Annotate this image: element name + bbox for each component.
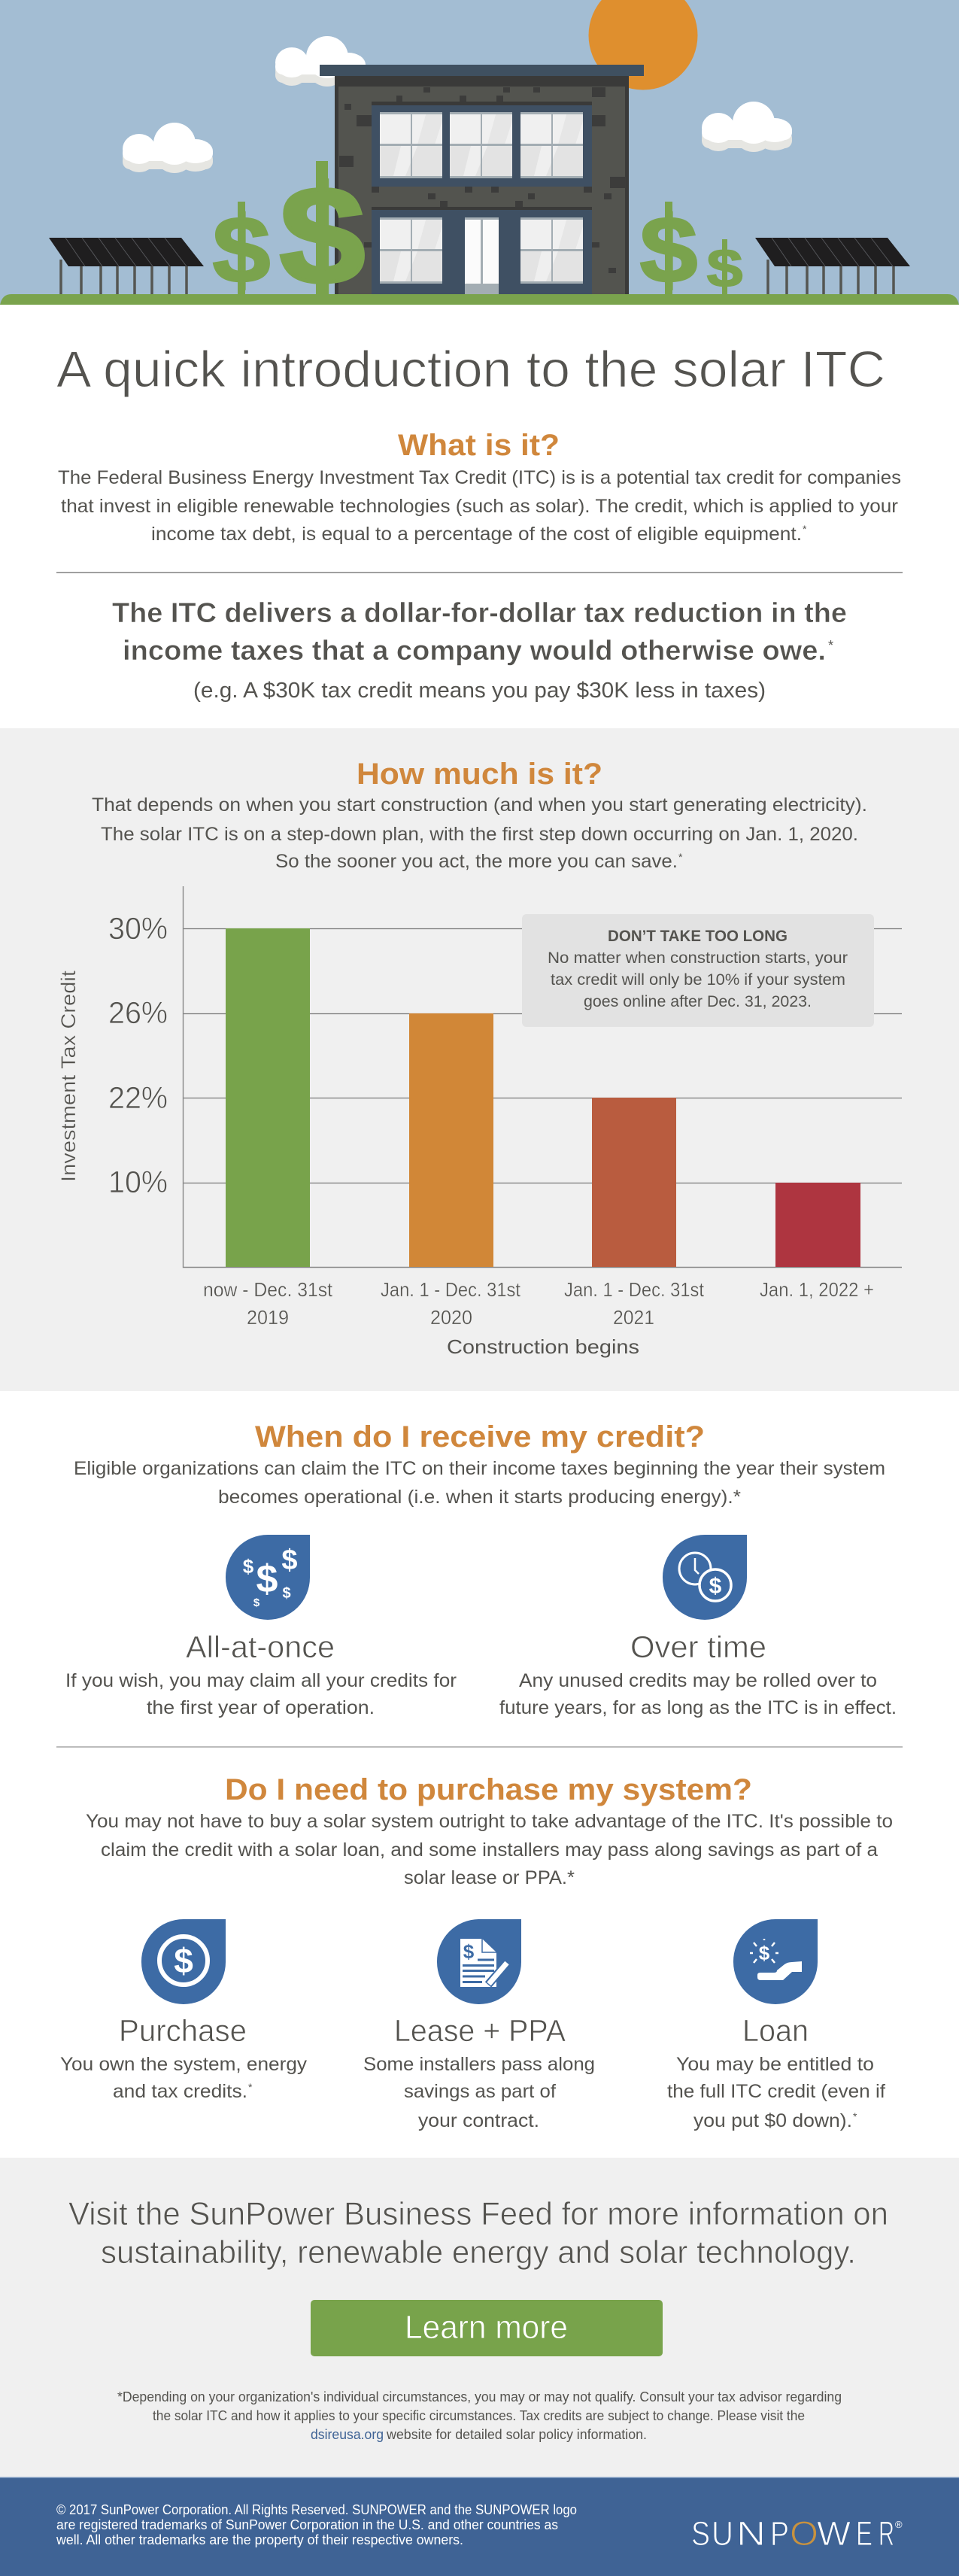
- option: loan: *: [853, 2110, 857, 2122]
- bar: 30%: [226, 928, 310, 1267]
- logo: SunPower: R: [879, 2514, 894, 2553]
- bar: 22%: [592, 1098, 676, 1267]
- logo: SunPower: W: [817, 2514, 851, 2553]
- option: loan: you put $0 down).: [693, 2110, 852, 2131]
- text block: visit the business feed: Visit the SunPower Business Feed for more information on: [68, 2196, 888, 2232]
- logo: SunPower: S: [691, 2514, 710, 2553]
- text block: copyright: are registered trademarks of SunPower Corporation in the U.S. and other countries as: [56, 2517, 558, 2532]
- heading: how much is it: How much is it?: [357, 758, 602, 791]
- icon: scattered dollars: $: [243, 1555, 254, 1578]
- text block: step-down explanation: *: [678, 851, 683, 863]
- x axis labels: Jan. 1 - Dec. 31st: [564, 1278, 705, 1301]
- icon: hand with dollar: [733, 1919, 818, 2004]
- option: lease + PPA: savings as part of: [404, 2081, 556, 2102]
- logo: SunPower: P: [770, 2514, 789, 2553]
- icon: cloud right: [702, 102, 792, 152]
- text block: definition: [58, 467, 901, 545]
- y axis labels: 22%: [108, 1080, 168, 1115]
- icon: cloud behind building: [275, 36, 366, 87]
- text block: footnote: [117, 2389, 842, 2442]
- button: learn more: [311, 2300, 663, 2356]
- callout: don't take too long: DON’T TAKE TOO LONG: [608, 928, 788, 945]
- x axis labels: 2021: [613, 1306, 654, 1329]
- panel: what is it: [58, 429, 901, 545]
- logo: SunPower: ®: [895, 2519, 903, 2530]
- x axis labels: Jan. 1 - Dec. 31st: [381, 1278, 521, 1301]
- icon: scattered dollars: $: [282, 1585, 291, 1602]
- button: learn more: Learn more: [405, 2309, 568, 2346]
- text block: eligibility: becomes operational (i.e. when it starts producing energy).*: [218, 1487, 741, 1508]
- y axis labels: 10%: [108, 1165, 168, 1199]
- icon: scattered dollars: $: [256, 1557, 278, 1601]
- option: lease + PPA: [363, 2013, 595, 2131]
- panel: how much is it: [0, 728, 959, 1391]
- option: purchase: Purchase: [119, 2013, 247, 2048]
- option: lease + PPA: Some installers pass along: [363, 2054, 595, 2075]
- option: lease + PPA: your contract.: [418, 2110, 539, 2131]
- callout: dollar-for-dollar statement: *: [828, 638, 833, 653]
- callout: don't take too long: No matter when construction starts, your: [548, 949, 848, 967]
- text block: definition: The Federal Business Energy Investment Tax Credit (ITC) is is a potential tax credit for companies: [58, 467, 901, 488]
- icon: scattered dollars: $: [281, 1545, 298, 1576]
- bar chart: [57, 886, 902, 1358]
- icon: hand with dollar: $: [759, 1942, 770, 1964]
- icon: dollar sign right: $: [640, 197, 697, 302]
- callout: dollar-for-dollar statement: income taxes that a company would otherwise owe.: [123, 635, 826, 666]
- icon: scattered dollars: $: [253, 1596, 260, 1609]
- ground: [0, 294, 959, 305]
- text block: footnote: dsireusa.org: [311, 2427, 384, 2442]
- text block: purchase intro: claim the credit with a solar loan, and some installers may pass along savings as part of a: [101, 1839, 878, 1861]
- building: [320, 65, 644, 294]
- option: over time: Any unused credits may be rolled over to: [519, 1670, 877, 1691]
- icon: contract document: [437, 1919, 521, 2004]
- option: purchase: [60, 2013, 308, 2102]
- text block: visit the business feed: [68, 2196, 888, 2271]
- option: loan: the full ITC credit (even if: [667, 2081, 885, 2102]
- text block: step-down explanation: So the sooner you act, the more you can save.: [275, 851, 678, 872]
- option: loan: Loan: [742, 2013, 809, 2048]
- text block: definition: that invest in eligible renewable technologies (such as solar). The credit, which is applied to your: [61, 496, 898, 517]
- icon: sun: [588, 0, 698, 90]
- text block: definition: income tax debt, is equal to a percentage of the cost of eligible equipment.: [151, 524, 802, 545]
- text block: purchase intro: You may not have to buy a solar system outright to take advantage of the ITC. It's possible to: [86, 1811, 893, 1832]
- x axis labels: 2019: [247, 1306, 289, 1329]
- logo: SunPower: O: [790, 2514, 818, 2553]
- callout: dollar-for-dollar statement: (e.g. A $30K tax credit means you pay $30K less in taxes): [193, 679, 766, 703]
- text block: purchase intro: [86, 1811, 893, 1888]
- text block: definition: *: [803, 523, 807, 535]
- option: loan: [667, 2013, 885, 2131]
- text block: footnote: *Depending on your organization's individual circumstances, you may or may not qualify. Consult your tax advisor regarding: [117, 2389, 842, 2404]
- hero illustration: [0, 0, 959, 314]
- option: over time: future years, for as long as the ITC is in effect.: [499, 1697, 897, 1718]
- option: lease + PPA: Lease + PPA: [394, 2013, 566, 2048]
- callout: dollar-for-dollar statement: The ITC delivers a dollar-for-dollar tax reduction in the: [112, 597, 847, 628]
- text block: copyright: [56, 2502, 577, 2547]
- icon: dollar coin: $: [174, 1941, 193, 1980]
- text block: visit the business feed: sustainability, renewable energy and solar technology.: [101, 2234, 856, 2271]
- text block: copyright: © 2017 SunPower Corporation. All Rights Reserved. SUNPOWER and the SUNPOWER logo: [56, 2502, 577, 2517]
- heading: what is it: What is it?: [398, 429, 560, 462]
- text block: step-down explanation: The solar ITC is on a step-down plan, with the first step down occurring on Jan. 1, 2020.: [101, 824, 858, 845]
- icon: solar array left: [49, 238, 204, 294]
- option: purchase: and tax credits.: [113, 2081, 247, 2102]
- bar: 26%: [409, 1013, 493, 1267]
- x axis title: Construction begins: [447, 1335, 639, 1358]
- text block: footnote: website for detailed solar policy information.: [386, 2427, 647, 2442]
- logo: SunPower: U: [712, 2514, 733, 2553]
- callout: dollar-for-dollar statement: [112, 597, 847, 703]
- footer: [0, 2477, 959, 2576]
- option: all-at-once: [65, 1630, 457, 1718]
- icon: dollar coin: [141, 1919, 226, 2004]
- icon: dollar sign small: $: [706, 238, 743, 298]
- icon: contract document: $: [463, 1940, 475, 1963]
- heading: when do I receive my credit: When do I receive my credit?: [255, 1420, 705, 1454]
- icon: dollar sign left: $: [213, 197, 270, 302]
- x axis labels: Jan. 1, 2022 +: [760, 1278, 874, 1301]
- heading: do I need to purchase: Do I need to purchase my system?: [225, 1773, 752, 1806]
- text block: eligibility: [74, 1458, 885, 1508]
- y axis labels: [108, 911, 168, 1199]
- option: loan: You may be entitled to: [676, 2054, 874, 2075]
- panel: when do I receive my credit: [65, 1420, 897, 1718]
- option: over time: [499, 1630, 897, 1718]
- title: A quick introduction to the solar ITC: [56, 341, 885, 398]
- logo: SunPower: N: [736, 2514, 766, 2553]
- panel: call to action: [0, 2158, 959, 2477]
- x axis labels: 2020: [430, 1306, 472, 1329]
- text block: step-down explanation: That depends on when you start construction (and when you start generating electricity).: [92, 794, 867, 816]
- y axis labels: 30%: [108, 911, 168, 946]
- x axis labels: now - Dec. 31st: [203, 1278, 333, 1301]
- text block: eligibility: Eligible organizations can claim the ITC on their income taxes beginning the year their system: [74, 1458, 885, 1479]
- text block: step-down explanation: [92, 794, 867, 872]
- option: all-at-once: If you wish, you may claim all your credits for: [65, 1670, 457, 1691]
- text block: footnote: the solar ITC and how it applies to your specific circumstances. Tax credits are subject to change. Please visit the: [153, 2408, 805, 2423]
- callout: don't take too long: [522, 914, 874, 1027]
- callout: don't take too long: goes online after Dec. 31, 2023.: [584, 993, 812, 1010]
- x axis labels: [203, 1278, 874, 1329]
- callout: don't take too long: tax credit will only be 10% if your system: [551, 971, 845, 989]
- icon: clock and coin: [663, 1535, 747, 1620]
- icon: cloud left: [123, 123, 213, 173]
- option: all-at-once: the first year of operation.: [147, 1697, 375, 1718]
- option: all-at-once: All-at-once: [186, 1630, 335, 1664]
- option: purchase: You own the system, energy: [60, 2054, 308, 2075]
- icon: clock and coin: $: [709, 1574, 722, 1599]
- text block: purchase intro: solar lease or PPA.*: [404, 1867, 575, 1888]
- icon: solar array right: [755, 238, 910, 294]
- logo: SunPower: E: [856, 2514, 873, 2553]
- logo: SunPower: [691, 2514, 903, 2553]
- bar: 10%: [775, 1183, 860, 1267]
- icon: dollar sign large: $: [280, 159, 365, 314]
- option: purchase: *: [248, 2081, 253, 2093]
- icon: scattered dollars: [226, 1535, 310, 1620]
- y axis labels: 26%: [108, 995, 168, 1030]
- y axis title: Investment Tax Credit: [57, 970, 80, 1182]
- panel: do I need to purchase my system: [60, 1773, 893, 2131]
- option: over time: Over time: [630, 1630, 766, 1664]
- text block: copyright: well. All other trademarks are the property of their respective owners.: [56, 2532, 463, 2547]
